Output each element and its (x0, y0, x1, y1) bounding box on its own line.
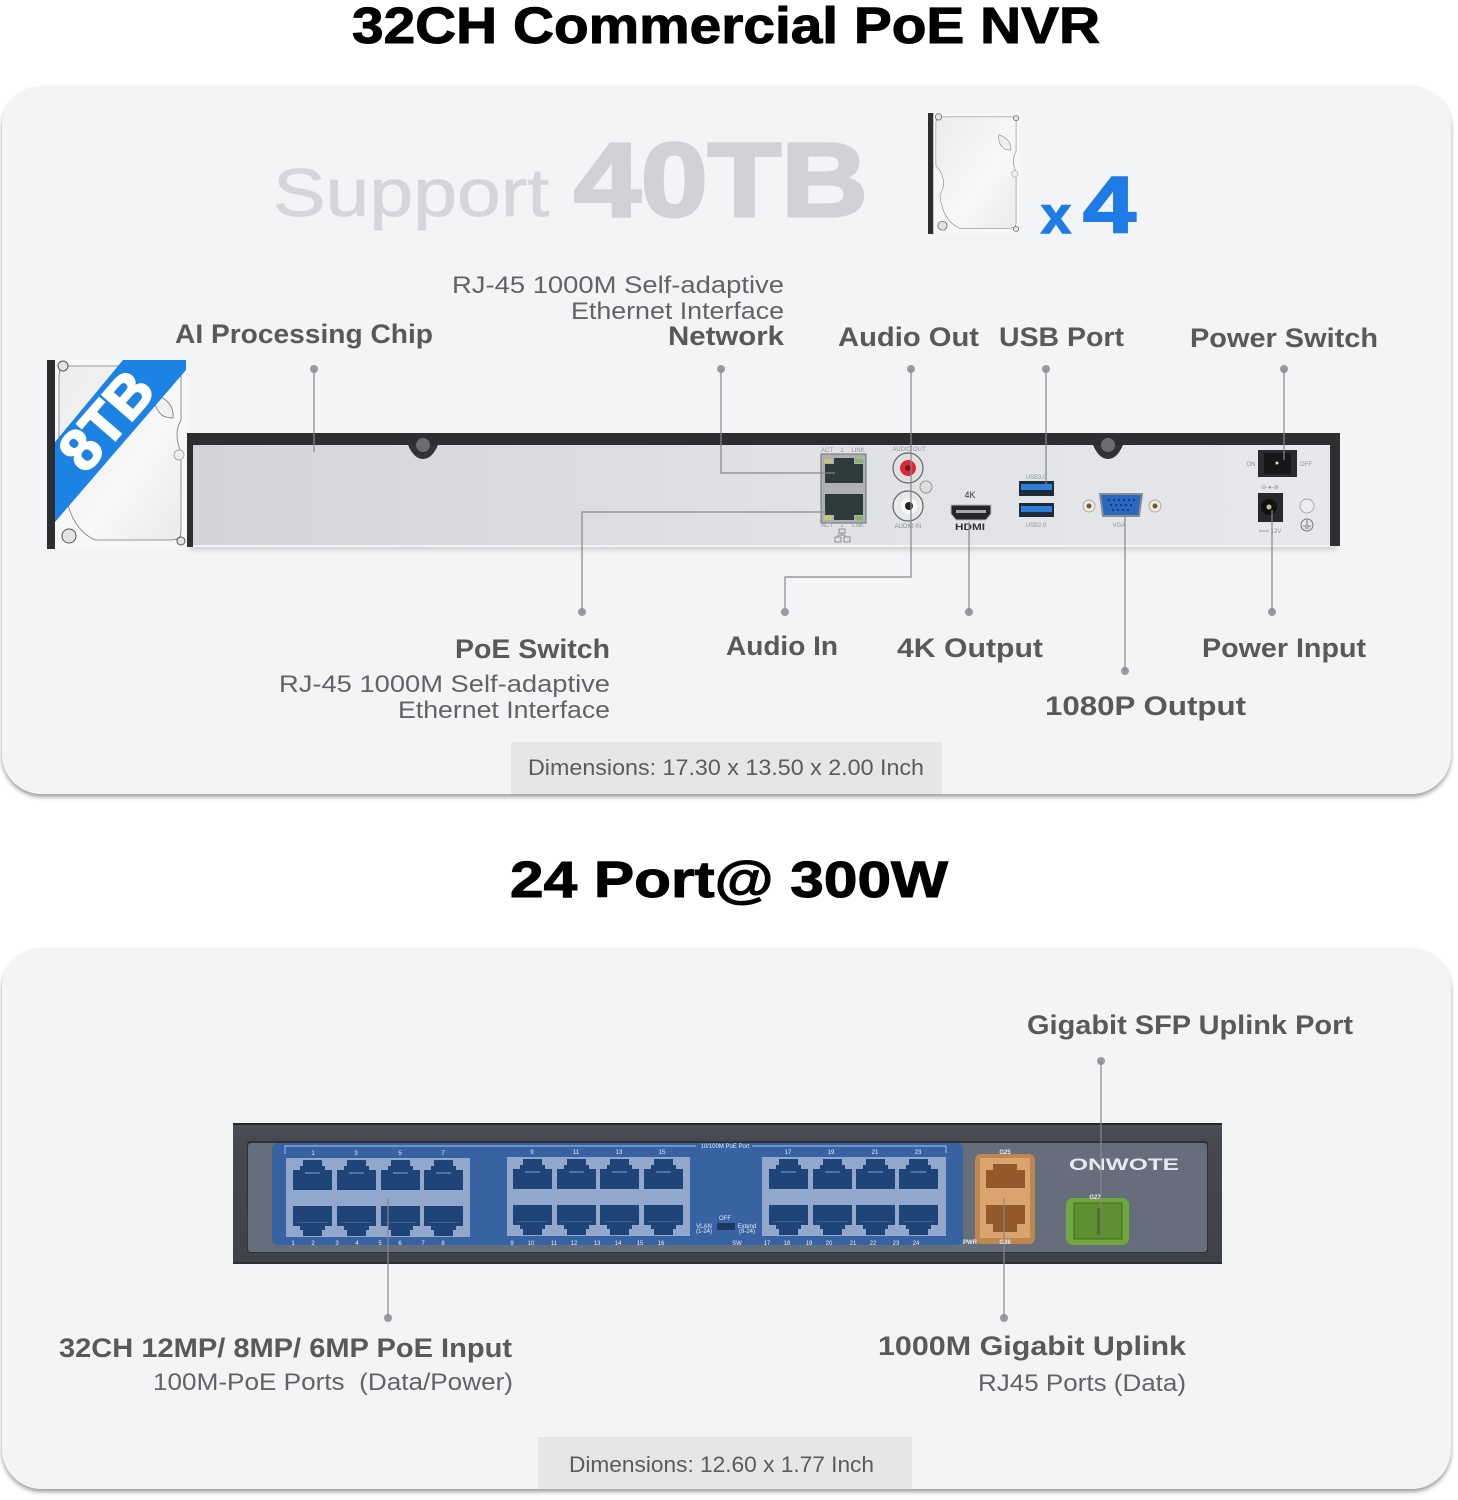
blue port panel: 17 (764, 1241, 771, 1247)
icon: hard drive x 4: x (1041, 187, 1071, 245)
label: Gigabit uplink (878, 1331, 1187, 1397)
dimensions: switch: Dimensions: 12.60 x 1.77 Inch (569, 1452, 874, 1477)
blue port panel: Extend (738, 1224, 756, 1230)
label: PoE Switch: RJ-45 1000M Self-adaptive (279, 671, 610, 698)
HDMI port: HDMI (955, 522, 985, 532)
blue port panel: 23 (893, 1241, 900, 1247)
label: PoE input: 100M-PoE Ports (Data/Power) (153, 1369, 513, 1396)
label: Gigabit SFP Uplink Port: Gigabit SFP Uplink Port (1027, 1010, 1353, 1040)
network ports: ACT (821, 523, 833, 529)
leader: AI Processing Chip (310, 365, 318, 452)
icon: 8TB hard drive (46, 358, 187, 549)
blue port panel: 22 (870, 1241, 877, 1247)
power input (1258, 485, 1283, 535)
NVR rear panel (187, 433, 1340, 550)
label: network description: RJ-45 1000M Self-adaptive (452, 272, 784, 299)
leader: Gigabit SFP Uplink Port (1097, 1057, 1105, 1235)
USB ports: USB3.0 (1026, 475, 1047, 481)
leader: Network (717, 365, 835, 473)
blue port panel: 24 (913, 1241, 920, 1247)
blue port panel: OFF (719, 1216, 731, 1222)
dimensions: NVR: Dimensions: 17.30 x 13.50 x 2.00 Inch (528, 755, 924, 780)
blue port panel: VLAN (696, 1224, 712, 1230)
blue port panel: 8 (441, 1241, 445, 1247)
label: 4K Output: 4K Output (897, 633, 1043, 663)
blue port panel: SW (732, 1241, 742, 1247)
USB ports (1019, 475, 1054, 529)
label: USB Port: USB Port (999, 322, 1124, 352)
VGA port: VGA (1113, 523, 1125, 529)
blue port panel: 23 (915, 1150, 922, 1156)
heading: Support 40TB (273, 122, 868, 239)
blue port panel: 5 (398, 1151, 402, 1157)
blue port panel: 5 (378, 1241, 382, 1247)
blue port panel: 2 (311, 1241, 315, 1247)
audio jacks (892, 447, 932, 530)
label: PoE Switch (279, 634, 610, 724)
heading: Support 40TB: 40TB (574, 122, 868, 239)
blue port panel: 16 (658, 1241, 665, 1247)
network ports (821, 448, 866, 542)
ground screw (1300, 499, 1314, 531)
icon: hard drive x 4: 4 (1083, 160, 1137, 249)
label: PoE input: 32CH 12MP/ 8MP/ 6MP PoE Input (59, 1333, 512, 1363)
HDMI port: 4K (964, 490, 976, 500)
title: 24 Port@ 300W: 24 Port@ 300W (510, 851, 949, 908)
network ports: ACT (821, 448, 833, 454)
blue port panel: 9 (510, 1241, 514, 1247)
uplink ports orange: PWR (963, 1240, 978, 1246)
power input: ⊖-●-⊕ (1261, 485, 1279, 491)
blue port panel: 1 (311, 1151, 315, 1157)
label: 1080P Output: 1080P Output (1045, 691, 1246, 721)
dimensions: NVR (511, 742, 942, 794)
brand: ONWOTE: ONWOTE (1069, 1155, 1179, 1174)
SFP port green: G27 (1089, 1195, 1101, 1201)
leader: Power Switch (1280, 365, 1288, 460)
uplink ports orange: G26 (999, 1240, 1011, 1246)
network ports: LINK (851, 448, 865, 454)
icon: hard drive x 4 (928, 113, 1137, 249)
blue port panel: 15 (637, 1241, 644, 1247)
panel: PoE switch (2, 948, 1451, 1489)
blue port panel: 19 (828, 1150, 835, 1156)
blue port panel: (9-24) (739, 1229, 755, 1235)
blue port panel: 13 (616, 1150, 623, 1156)
audio jacks: AUDIO OUT (892, 447, 926, 453)
blue port panel: 12 (571, 1241, 578, 1247)
blue port panel: 11 (551, 1241, 558, 1247)
blue port panel: 18 (784, 1241, 791, 1247)
blue port panel: 10 (528, 1241, 535, 1247)
blue port panel: 15 (659, 1150, 666, 1156)
audio jacks: AUDIO IN (895, 524, 921, 530)
leader: Audio Out and Audio In (781, 365, 915, 616)
blue port panel: 1 (291, 1241, 295, 1247)
blue port panel: 21 (872, 1150, 879, 1156)
blue port panel (272, 1143, 963, 1247)
label: Power Switch: Power Switch (1190, 323, 1378, 353)
blue port panel: 13 (594, 1241, 601, 1247)
blue port panel: 20 (826, 1241, 833, 1247)
label: network description: Network (668, 321, 785, 351)
blue port panel: 3 (354, 1151, 358, 1157)
screw right (1093, 438, 1123, 459)
blue port panel: 6 (398, 1241, 402, 1247)
blue port panel: 14 (615, 1241, 622, 1247)
blue port panel: 7 (441, 1151, 445, 1157)
PoE switch front panel (233, 1123, 1222, 1264)
power input: === 12V (1259, 529, 1281, 535)
HDMI port (951, 490, 991, 532)
label: network description (452, 272, 785, 351)
blue port panel: 11 (573, 1150, 580, 1156)
leader: Power Input (1268, 510, 1276, 616)
power switch: ON (1246, 462, 1256, 468)
label: Power Input: Power Input (1202, 633, 1366, 663)
leader: 1080P Output (1121, 516, 1129, 675)
blue port panel: 17 (785, 1150, 792, 1156)
blue port panel: 19 (806, 1241, 813, 1247)
leader: PoE input (384, 1198, 392, 1322)
network ports: 2 (840, 523, 844, 529)
leader: USB Port (1042, 365, 1050, 484)
panel: NVR (2, 86, 1451, 794)
blue port panel: 7 (421, 1241, 425, 1247)
label: AI Processing Chip: AI Processing Chip (175, 319, 433, 349)
leader: PoE Switch (578, 512, 826, 616)
blue port panel: 21 (850, 1241, 857, 1247)
label: PoE Switch: PoE Switch (455, 634, 610, 664)
network ports: LNK (852, 523, 864, 529)
label: Audio In: Audio In (726, 631, 838, 661)
icon: 8TB hard drive: 8TB (46, 358, 167, 483)
USB ports: USB2.0 (1026, 523, 1047, 529)
power switch: OFF (1300, 462, 1312, 468)
screw left (408, 438, 438, 459)
blue port panel: 10/100M PoE Port (700, 1144, 750, 1150)
network ports: 1 (840, 448, 844, 454)
dimensions: switch (538, 1437, 912, 1489)
leader: 4K Output (965, 522, 973, 616)
heading: Support 40TB: Support (273, 155, 549, 231)
label: PoE input (59, 1333, 513, 1396)
label: Gigabit uplink: 1000M Gigabit Uplink (878, 1331, 1187, 1361)
uplink ports orange: G25 (999, 1150, 1011, 1156)
blue port panel: 9 (530, 1150, 534, 1156)
label: network description: Ethernet Interface (571, 298, 784, 325)
VGA port (1083, 494, 1161, 529)
uplink ports orange (963, 1150, 1035, 1246)
blue port panel: 3 (335, 1241, 339, 1247)
blue port panel: (1-24) (696, 1229, 712, 1235)
power switch (1246, 450, 1312, 477)
label: Gigabit uplink: RJ45 Ports (Data) (978, 1370, 1186, 1397)
blue port panel: 4 (355, 1241, 359, 1247)
leader: Gigabit uplink (1000, 1198, 1008, 1322)
SFP port green (1066, 1195, 1129, 1245)
label: PoE Switch: Ethernet Interface (398, 697, 610, 724)
label: Audio Out: Audio Out (838, 322, 979, 352)
